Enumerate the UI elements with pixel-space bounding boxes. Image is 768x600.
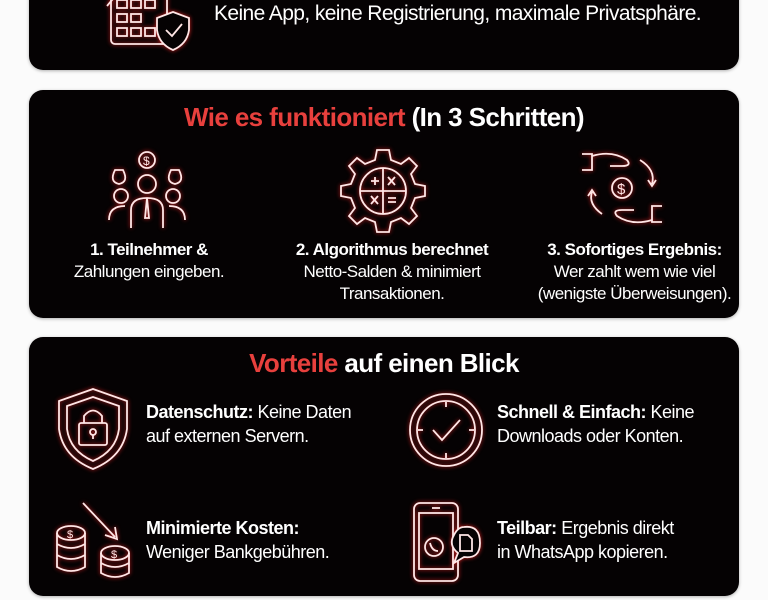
icon: coins with down arrow: $ <box>111 549 117 561</box>
step 2: 2. Algorithmus berechnet <box>296 240 488 259</box>
step 2: Transaktionen. <box>340 284 444 303</box>
step 3: Wer zahlt wem wie viel <box>554 262 715 281</box>
step 1: 1. Teilnehmer & <box>90 240 208 259</box>
text: Schnell & Einfach: Downloads oder Konten. <box>497 426 683 446</box>
step 1: Zahlungen eingeben. <box>74 262 224 281</box>
icon: coins with down arrow: $ <box>67 529 73 541</box>
step 3: (wenigste Überweisungen). <box>538 284 731 303</box>
icon: hands exchanging money <box>580 150 664 226</box>
step 2 <box>296 240 488 303</box>
heading: how it works: Wie es funktioniert (In 3 Schritten) <box>184 102 584 132</box>
text: Schnell & Einfach <box>497 402 694 446</box>
text: Teilbar: in WhatsApp kopieren. <box>497 542 668 562</box>
panel: top intro <box>29 0 739 70</box>
step 2: Netto-Salden & minimiert <box>304 262 480 281</box>
icon: hands exchanging money: $ <box>617 181 626 198</box>
icon: clock with check <box>406 390 486 470</box>
icon: participants with money <box>105 148 189 230</box>
step 3 <box>538 240 731 303</box>
text: Minimierte Kosten: Minimierte Kosten: <box>146 518 299 538</box>
icon: shield with lock <box>54 385 132 473</box>
text: Teilbar <box>497 518 674 562</box>
panel: how it works <box>29 90 739 318</box>
text: intro line: Keine App, keine Registrierung, maximale Privatsphäre. <box>214 2 701 25</box>
icon: gear with calculator <box>336 146 430 236</box>
text: Datenschutz <box>146 402 351 446</box>
step 1 <box>74 240 224 281</box>
step 3: 3. Sofortiges Ergebnis: <box>547 240 722 259</box>
panel: advantages <box>29 337 739 596</box>
icon: coins with down arrow <box>52 500 134 582</box>
text: Minimierte Kosten <box>146 518 329 562</box>
icon: calendar with shield <box>104 0 194 54</box>
text: Schnell & Einfach: Schnell & Einfach: Keine <box>497 402 694 422</box>
icon: participants with money: $ <box>143 154 150 168</box>
icon: phone with chat <box>410 498 484 586</box>
text: Datenschutz: Datenschutz: Keine Daten <box>146 402 351 422</box>
text: Minimierte Kosten: Weniger Bankgebühren. <box>146 542 329 562</box>
heading: advantages: Vorteile auf einen Blick <box>249 348 519 378</box>
text: Datenschutz: auf externen Servern. <box>146 426 309 446</box>
text: Teilbar: Teilbar: Ergebnis direkt <box>497 518 674 538</box>
